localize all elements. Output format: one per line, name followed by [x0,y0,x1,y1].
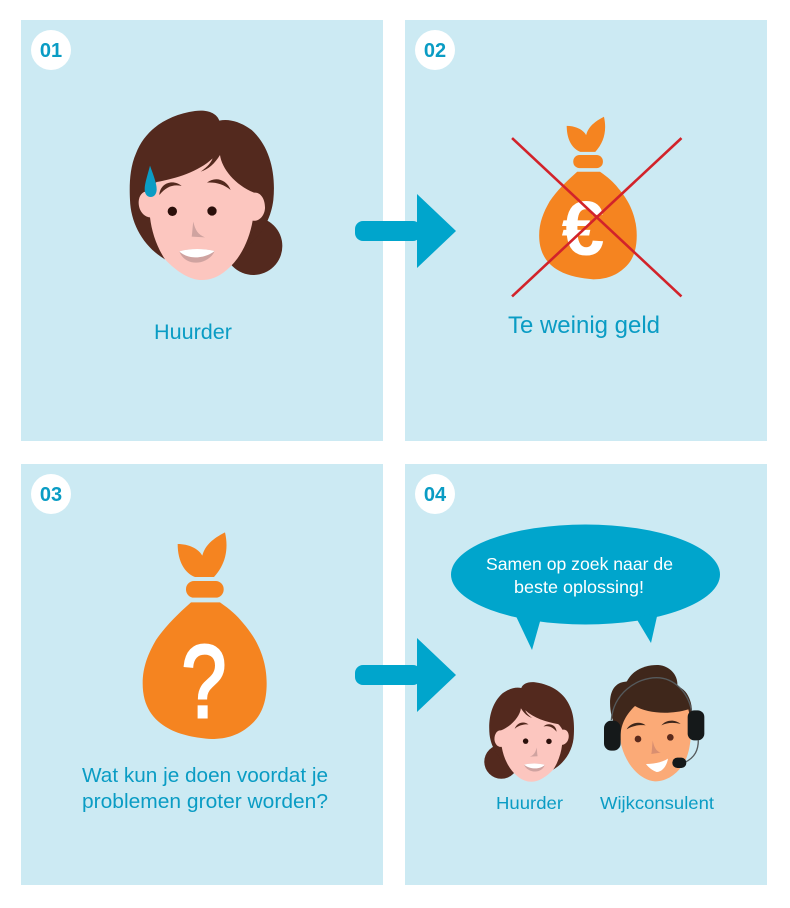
number badge 02: 02 [424,40,446,62]
text: question: Wat kun je doen voordat je [82,764,328,787]
number badge 01 [31,30,71,70]
icon: worried tenant face with sweat drop [130,111,282,280]
icon: consultant face with headset [604,665,704,781]
number badge 03: 03 [40,484,62,506]
icon: money bag with question mark [143,532,267,739]
speech bubble: Samen op zoek naar de [486,554,673,574]
icon: red cross [513,139,680,296]
icon: money bag with euro sign [539,117,637,279]
arrow: panel 03 to 04 [355,638,456,712]
icon: money bag with euro sign: € [562,186,604,272]
speech bubble: beste oplossing! [514,577,644,597]
panel background 04 [405,464,767,885]
label: Te weinig geld: Te weinig geld [508,312,660,339]
icon: sweat drop [145,166,157,197]
panel 01: tenant [21,20,383,441]
label: Huurder: Huurder [496,793,563,813]
panel 03: what can you do [21,464,383,885]
number badge 04 [415,474,455,514]
arrow: panel 01 to 02 [355,194,456,268]
number badge 04: 04 [424,484,447,506]
panel background 03 [21,464,383,885]
number badge 02 [415,30,455,70]
panel background 01 [21,20,383,441]
text: question [82,764,328,813]
panel background 02 [405,20,767,441]
panel 04: search together [405,464,767,885]
text: question: problemen groter worden? [82,790,328,813]
speech bubble [451,524,720,650]
icon: tenant face [484,682,574,782]
icon: money bag with question mark: ? [182,623,226,739]
number badge 03 [31,474,71,514]
label: Huurder: Huurder [154,321,232,344]
number badge 01: 01 [40,40,62,62]
panel 02: too little money [405,20,767,441]
label: Wijkconsulent: Wijkconsulent [600,793,714,813]
